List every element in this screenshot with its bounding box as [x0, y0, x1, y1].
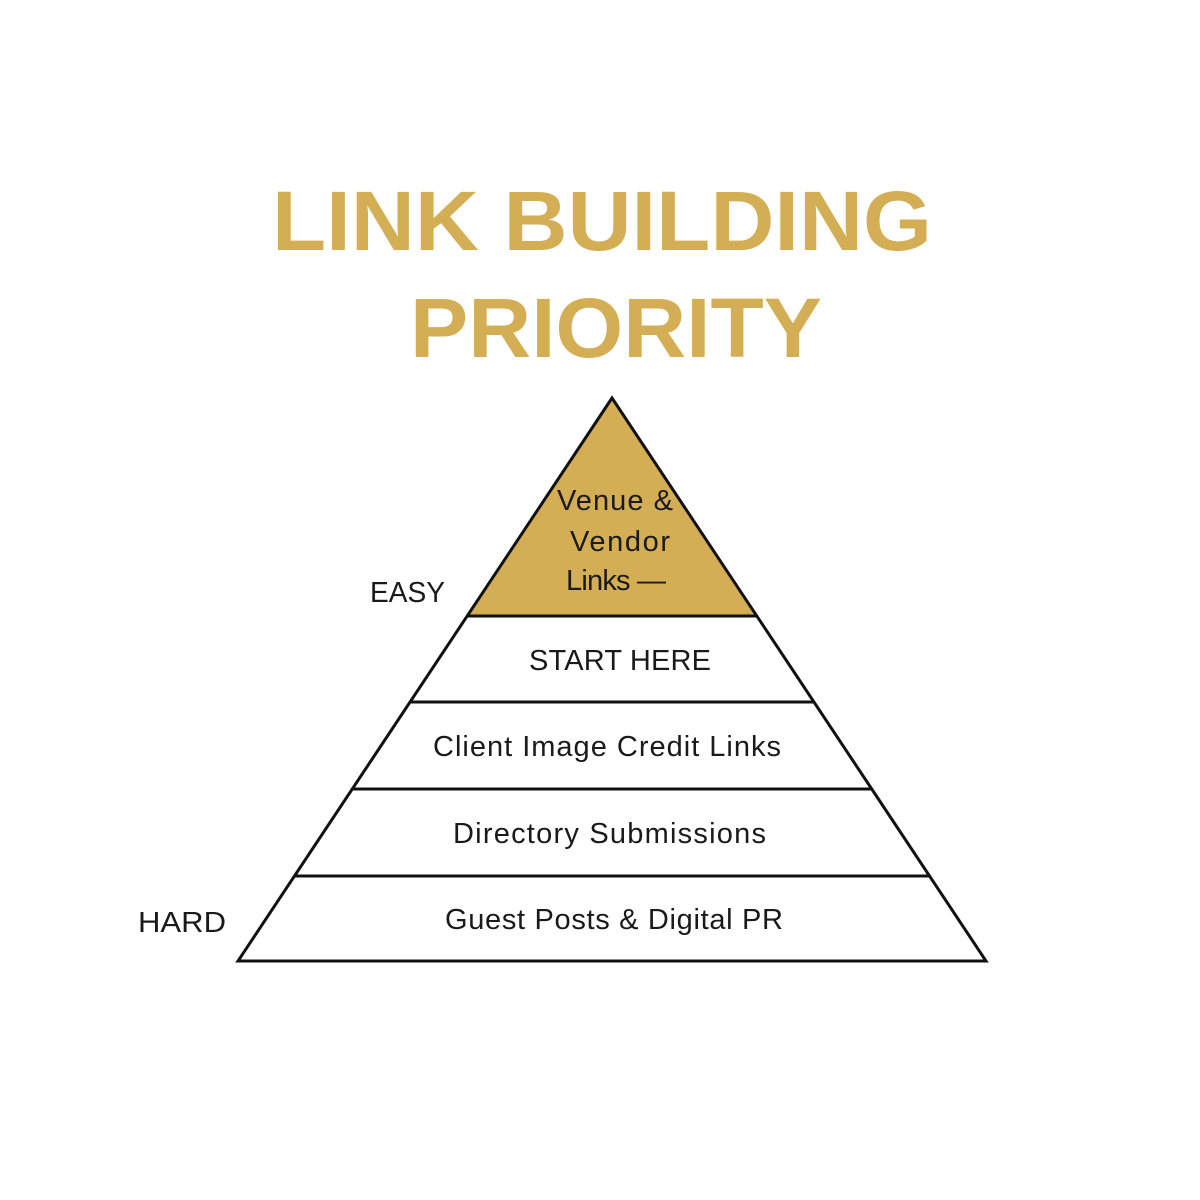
axis label: easy: EASY [370, 577, 445, 609]
pyramid top tier: gold [467, 398, 757, 616]
tier labels [433, 485, 783, 936]
tier labels: Guest Posts & Digital PR [445, 904, 783, 936]
tier labels: START HERE [529, 645, 711, 677]
tier labels: Venue & [557, 485, 673, 517]
tier labels: Client Image Credit Links [433, 731, 781, 763]
pyramid [238, 398, 986, 961]
tier labels: Links — [566, 565, 666, 597]
title: PRIORITY [410, 281, 822, 375]
tier labels: Vendor [570, 526, 670, 558]
title: LINK BUILDING [272, 174, 932, 268]
axis label: hard: HARD [138, 907, 226, 939]
title [272, 174, 932, 375]
tier labels: Directory Submissions [453, 818, 766, 850]
